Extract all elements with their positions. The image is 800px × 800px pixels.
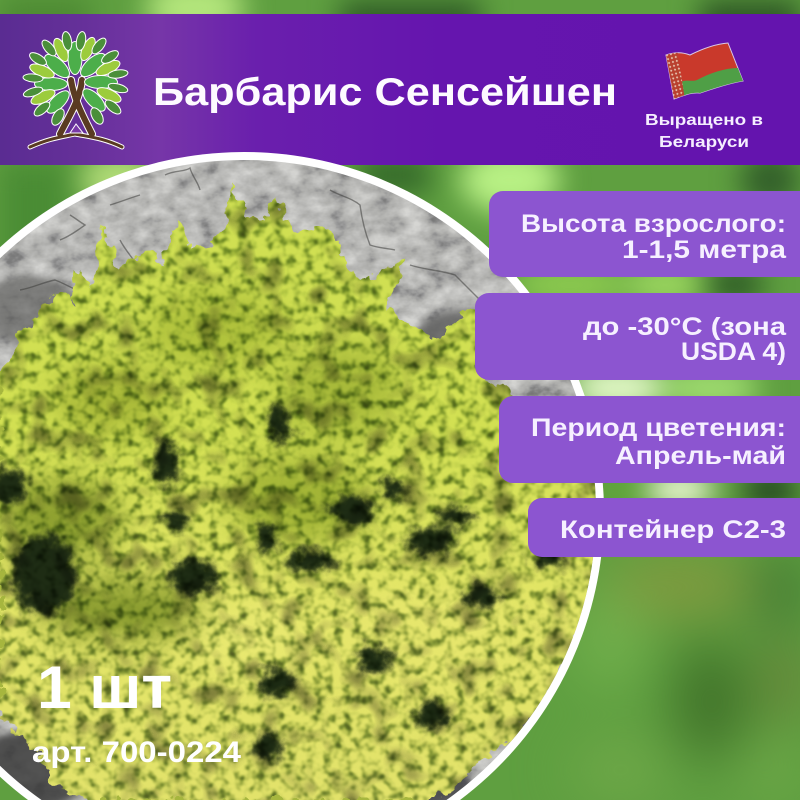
card: flowering period [499, 396, 800, 483]
shading on the foliage [0, 280, 412, 664]
label: grown in Belarus: Выращено в [645, 112, 763, 129]
quantity label: 1 шт [37, 654, 172, 721]
title: Барбарис Сенсейшен [153, 71, 617, 114]
article number: арт. 700-0224 [32, 736, 241, 769]
soil [0, 150, 610, 800]
dark gaps between branches [0, 405, 565, 759]
icon: Belarus flag [664, 43, 745, 102]
card: mature height: Высота взрослого: [521, 210, 786, 238]
photo: barberry shrub in round frame [0, 150, 612, 800]
card: frost hardiness: до -30°С (зона [583, 313, 787, 341]
leaves [22, 31, 129, 127]
shrub foliage [0, 187, 612, 800]
card: container: Контейнер С2-3 [560, 516, 786, 544]
label: grown in Belarus [645, 112, 763, 151]
header band [0, 14, 800, 165]
foliage under-layer for frame edges [0, 372, 420, 800]
card: mature height: 1-1,5 метра [622, 236, 787, 264]
card: flowering period: Период цветения: [531, 414, 786, 442]
card: flowering period: Апрель-май [615, 442, 786, 470]
card: frost hardiness: USDA 4) [681, 338, 786, 366]
label: grown in Belarus: Беларуси [659, 134, 749, 151]
card: container [528, 498, 800, 557]
card: mature height [489, 191, 800, 277]
logo: tree [22, 31, 129, 147]
card: frost hardiness [475, 293, 800, 380]
trunk and roots [30, 80, 122, 147]
